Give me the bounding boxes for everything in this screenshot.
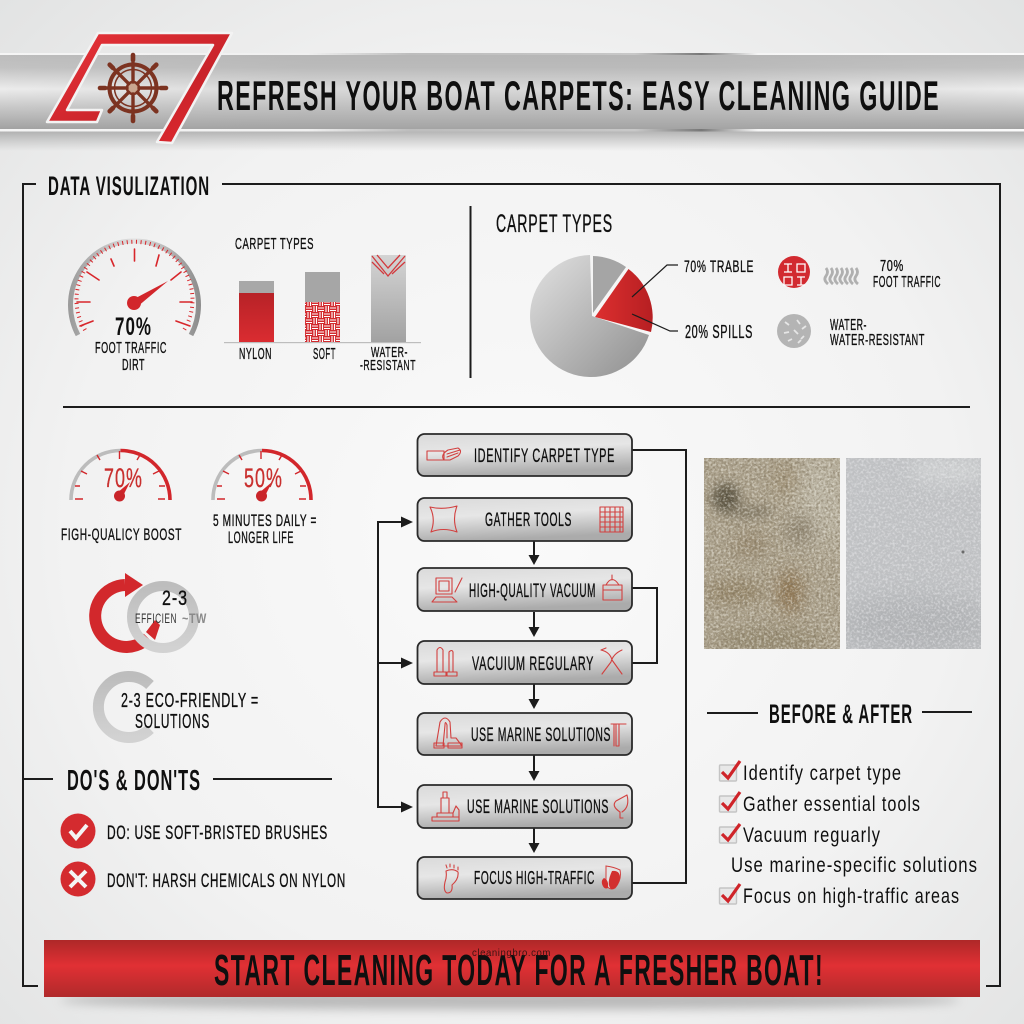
step: use marine solutions: USE MARINE SOLUTIONS <box>471 724 611 746</box>
dont text: DON'T: HARSH CHEMICALS ON NYLON <box>107 871 346 892</box>
step: focus high traffic: FOCUS HIGH-TRAFFIC <box>474 867 595 888</box>
after photo: clean carpet <box>846 458 981 649</box>
checklist item: high traffic: Focus on high-traffic areas <box>743 885 960 908</box>
panel: before and after checklist <box>707 699 978 908</box>
step: gather tools: GATHER TOOLS <box>485 509 572 531</box>
step: focus high traffic <box>418 857 632 899</box>
panel: data visualization <box>48 171 421 374</box>
foot traffic gauge <box>70 241 198 374</box>
bar chart: carpet types <box>224 236 421 374</box>
heading: carpet types: CARPET TYPES <box>496 210 613 238</box>
heading: dos and donts: DO'S & DON'TS <box>67 765 201 797</box>
call to action banner <box>44 940 980 1010</box>
step: vacuum regularly: VACUIUM REGULARY <box>472 653 594 675</box>
step: vacuum regularly <box>418 641 632 684</box>
icon: cross <box>60 862 96 896</box>
cycle icon: 2-3 efficient: ~TW <box>182 610 207 626</box>
callout lines <box>632 265 678 331</box>
divider <box>470 206 472 378</box>
ring icon: eco friendly solutions: 2-3 ECO-FRIENDLY = <box>121 689 259 712</box>
bar chart: carpet types: WATER- <box>371 344 408 361</box>
ring icon: eco friendly solutions <box>98 676 259 738</box>
bar chart: carpet types: SOFT <box>313 346 336 363</box>
gauge label: five minutes daily <box>213 512 317 547</box>
outer frame <box>23 184 1000 986</box>
checklist item: gather <box>720 792 921 816</box>
step: use marine solutions 2 <box>418 785 632 828</box>
panel: small gauges <box>61 450 317 738</box>
cycle icon: 2-3 efficient: EFFICIEN <box>135 611 177 626</box>
gauge: 50 percent: 50% <box>244 463 283 493</box>
step: use marine solutions <box>418 713 632 755</box>
connector lines <box>378 450 686 883</box>
do text: DO: USE SOFT-BRISTED BRUSHES <box>107 823 328 844</box>
cycle icon: 2-3 efficient: 2-3 <box>162 587 188 610</box>
foot traffic gauge: 70% <box>115 313 152 341</box>
checklist item: identify: Identify carpet type <box>743 762 902 785</box>
watermark: cleaningbro.com <box>472 947 551 959</box>
panel: carpet types pie: 70% TRABLE <box>684 257 754 276</box>
icon: grey wavy swatch <box>825 268 858 284</box>
checklist item: high traffic <box>720 884 960 908</box>
checklist item: gather: Gather essential tools <box>743 793 921 816</box>
icon: ship wheel <box>100 55 166 121</box>
gauge label: five minutes daily: LONGER LIFE <box>228 529 294 547</box>
step: high quality vacuum <box>418 568 632 611</box>
pie chart <box>530 255 653 377</box>
gauge label: high quality boost: FIGH-QUALICY BOOST <box>61 525 182 544</box>
gauge: 70 percent: 70% <box>104 463 143 493</box>
gauge: 70 percent <box>71 450 170 502</box>
step: high quality vacuum: HIGH-QUALITY VACUUM <box>469 580 596 602</box>
panel: dos and donts <box>24 765 346 896</box>
step: identify carpet type <box>418 434 632 476</box>
cycle icon: 2-3 efficient <box>95 573 207 648</box>
panel: carpet types pie <box>496 210 941 377</box>
step: identify carpet type: IDENTIFY CARPET TYPE <box>474 445 615 467</box>
icon: grey speckled swatch <box>777 314 811 348</box>
checklist item: vacuum: Vacuum reguarly <box>743 824 881 847</box>
panel: carpet types pie: FOOT TRAFFIC <box>873 274 941 291</box>
bar chart: carpet types: -RESISTANT <box>360 357 416 374</box>
bar chart: carpet types: NYLON <box>239 346 272 363</box>
step: use marine solutions 2: USE MARINE SOLUTIONS <box>467 796 609 818</box>
foot traffic gauge: FOOT TRAFFIC <box>95 340 167 357</box>
heading: before and after: BEFORE & AFTER <box>769 699 913 729</box>
foot traffic gauge: DIRT <box>122 357 145 374</box>
panel: carpet types pie: WATER- <box>830 317 867 334</box>
heading: data visualization: DATA VISULIZATION <box>48 171 210 201</box>
ring icon: eco friendly solutions: SOLUTIONS <box>135 710 210 733</box>
checklist item: vacuum <box>720 824 881 847</box>
header banner <box>0 33 1024 151</box>
step: gather tools <box>418 498 632 541</box>
icon: red carpet swatch <box>778 256 810 288</box>
logo: red frame with ship wheel <box>47 33 232 143</box>
panel: carpet types pie: 20% SPILLS <box>685 322 753 342</box>
gauge: 50 percent <box>213 450 311 502</box>
divider <box>63 406 970 408</box>
gauge label: five minutes daily: 5 MINUTES DAILY = <box>213 512 317 530</box>
icon: check <box>60 814 96 848</box>
bar chart: carpet types: CARPET TYPES <box>235 236 314 253</box>
before photo: dirty carpet <box>704 450 846 652</box>
gauge needle <box>127 281 168 310</box>
checklist item: identify <box>720 761 902 785</box>
flowchart <box>378 434 686 899</box>
panel: carpet types pie: 70% <box>880 258 904 275</box>
panel: carpet types pie: WATER-RESISTANT <box>830 332 925 349</box>
